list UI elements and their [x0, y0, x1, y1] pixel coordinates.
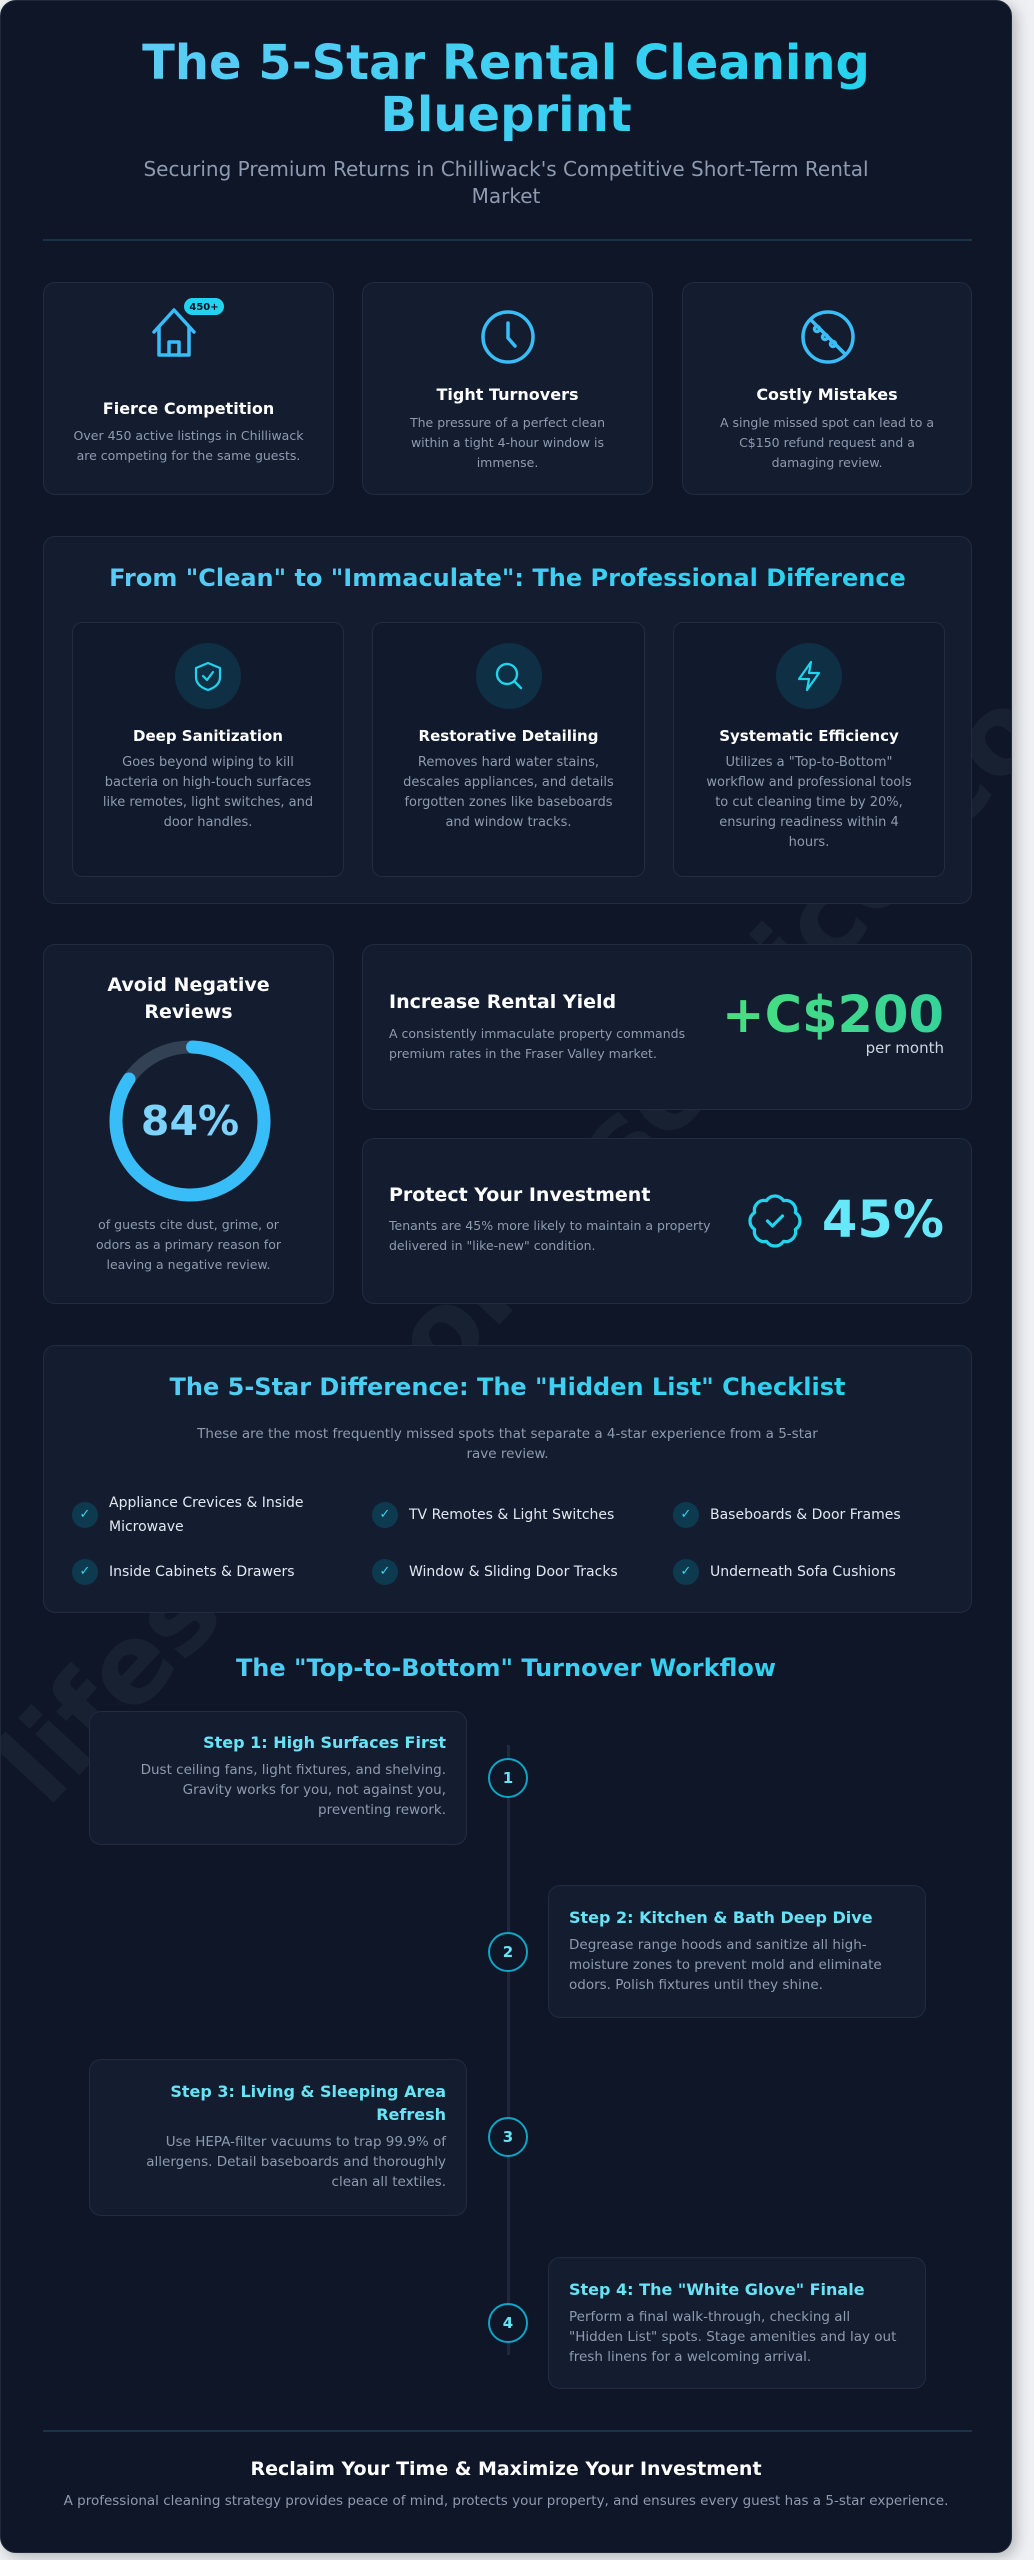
heading: From "Clean" to "Immaculate": The Professional Difference: [109, 564, 906, 592]
text: Over 450 active listings in Chilliwack are competing for the same guests.: [74, 428, 303, 463]
card: restorative detailing: Restorative Detailing: [419, 727, 598, 745]
panel: increase rental yield: [362, 944, 972, 1110]
panel: protect investment: Protect Your Investment: [389, 1184, 650, 1206]
heading: The 5-Star Difference: The "Hidden List" Checklist: [170, 1373, 845, 1401]
panel: protect investment: [362, 1138, 972, 1304]
step 3: Use HEPA-filter vacuums to trap 99.9% of allergens. Detail baseboards and thoroughly clean all textiles.: [146, 2134, 446, 2190]
panel: increase rental yield: Increase Rental Yield: [389, 991, 616, 1013]
step 3: Step 3: Living & Sleeping Area Refresh: [170, 2082, 446, 2124]
timeline: [89, 1711, 926, 2389]
checklist items: ✓: [681, 1564, 691, 1579]
workflow heading: [1, 1654, 1011, 1682]
icon: shield: [175, 643, 241, 709]
card: restorative detailing: Removes hard water stains, descales appliances, and details forgotten zones like baseboards and window tracks.: [403, 755, 614, 830]
workflow heading: The "Top-to-Bottom" Turnover Workflow: [236, 1654, 776, 1682]
heading: Avoid Negative Reviews: [107, 974, 270, 1023]
panel: avoid negative reviews: [43, 944, 334, 1304]
panel: protect investment: Tenants are 45% more likely to maintain a property delivered in "like-new" condition.: [389, 1218, 710, 1253]
checklist items: TV Remotes & Light Switches: [409, 1507, 614, 1523]
panel: hidden list checklist: [43, 1345, 972, 1613]
checklist items: ✓: [80, 1507, 90, 1522]
icon: ban: [801, 310, 855, 364]
timeline: 4: [503, 2314, 513, 2332]
step 2: Degrease range hoods and sanitize all high-moisture zones to prevent mold and eliminate odors. Polish fixtures until they shine.: [569, 1937, 882, 1993]
step 2: [548, 1885, 926, 2018]
timeline: 2: [503, 1943, 513, 1961]
card: systematic efficiency: [673, 622, 945, 877]
card: deep sanitization: Goes beyond wiping to kill bacteria on high-touch surfaces like remotes, light switches, and door handles.: [103, 755, 313, 830]
footer text: A professional cleaning strategy provides peace of mind, protects your property, and ensures every guest has a 5-star experience.: [64, 2493, 948, 2509]
text: These are the most frequently missed spots that separate a 4-star experience from a 5-star rave review.: [197, 1426, 818, 1462]
checklist items: ✓: [380, 1564, 390, 1579]
footer heading: Reclaim Your Time & Maximize Your Investment: [250, 2458, 762, 2480]
step 2: Step 2: Kitchen & Bath Deep Dive: [569, 1908, 873, 1927]
step 4: Step 4: The "White Glove" Finale: [569, 2280, 865, 2299]
step 3: [89, 2059, 467, 2216]
checklist items: ✓: [681, 1507, 691, 1522]
card: systematic efficiency: Utilizes a "Top-to-Bottom" workflow and professional tools to cut cleaning time by 20%, ensuring readiness within 4 hours.: [706, 755, 912, 850]
text: A single missed spot can lead to a C$150 refund request and a damaging review.: [720, 415, 934, 470]
caption: of guests cite dust, grime, or odors as a primary reason for leaving a negative review.: [96, 1217, 281, 1272]
panel: professional difference: [43, 536, 972, 904]
heading: Costly Mistakes: [756, 385, 898, 404]
heading: Tight Turnovers: [436, 385, 578, 404]
panel: fierce competition: [43, 282, 334, 495]
card: systematic efficiency: Systematic Efficiency: [719, 727, 899, 745]
step 4: [548, 2257, 926, 2389]
subtitle: Securing Premium Returns in Chilliwack's Competitive Short-Term Rental Market: [143, 157, 869, 208]
step 4: Perform a final walk-through, checking all "Hidden List" spots. Stage amenities and lay out fresh linens for a welcoming arrival.: [569, 2309, 896, 2365]
icon: badge check: [748, 1194, 802, 1248]
heading: Fierce Competition: [103, 399, 274, 418]
card: deep sanitization: Deep Sanitization: [133, 727, 283, 745]
checklist items: Baseboards & Door Frames: [710, 1507, 901, 1523]
step 1: Dust ceiling fans, light fixtures, and shelving. Gravity works for you, not against you, preventing rework.: [141, 1762, 446, 1818]
timeline: 1: [503, 1769, 513, 1787]
card: restorative detailing: [372, 622, 645, 877]
checklist items: Underneath Sofa Cushions: [710, 1564, 896, 1580]
panel: increase rental yield: A consistently immaculate property commands premium rates in the Fraser Valley market.: [389, 1026, 685, 1061]
timeline: 3: [503, 2128, 513, 2146]
icon: lightning: [776, 643, 842, 709]
text: The pressure of a perfect clean within a tight 4-hour window is immense.: [410, 415, 605, 470]
donut chart 84%: [110, 1040, 270, 1202]
donut chart 84%: 84%: [141, 1097, 239, 1145]
icon: house: 450+: [189, 302, 219, 313]
checklist items: Appliance Crevices & Inside Microwave: [109, 1495, 303, 1535]
stat: +C$200: +C$200: [722, 986, 944, 1045]
icon: house: [152, 298, 224, 357]
checklist items: Inside Cabinets & Drawers: [109, 1564, 295, 1580]
checklist items: ✓: [80, 1564, 90, 1579]
checklist items: ✓: [380, 1507, 390, 1522]
icon: search: [476, 643, 542, 709]
panel: costly mistakes: [682, 282, 972, 495]
step 1: [89, 1711, 467, 1845]
card: deep sanitization: [72, 622, 344, 877]
step 1: Step 1: High Surfaces First: [203, 1733, 446, 1752]
checklist items: [72, 1495, 901, 1585]
panel: tight turnovers: [362, 282, 653, 495]
stat: +C$200: per month: [866, 1039, 944, 1057]
checklist items: Window & Sliding Door Tracks: [409, 1564, 618, 1580]
title: The 5-Star Rental Cleaning Blueprint: [142, 35, 870, 143]
icon: clock: [481, 310, 535, 364]
stat: 45%: 45%: [822, 1191, 944, 1250]
